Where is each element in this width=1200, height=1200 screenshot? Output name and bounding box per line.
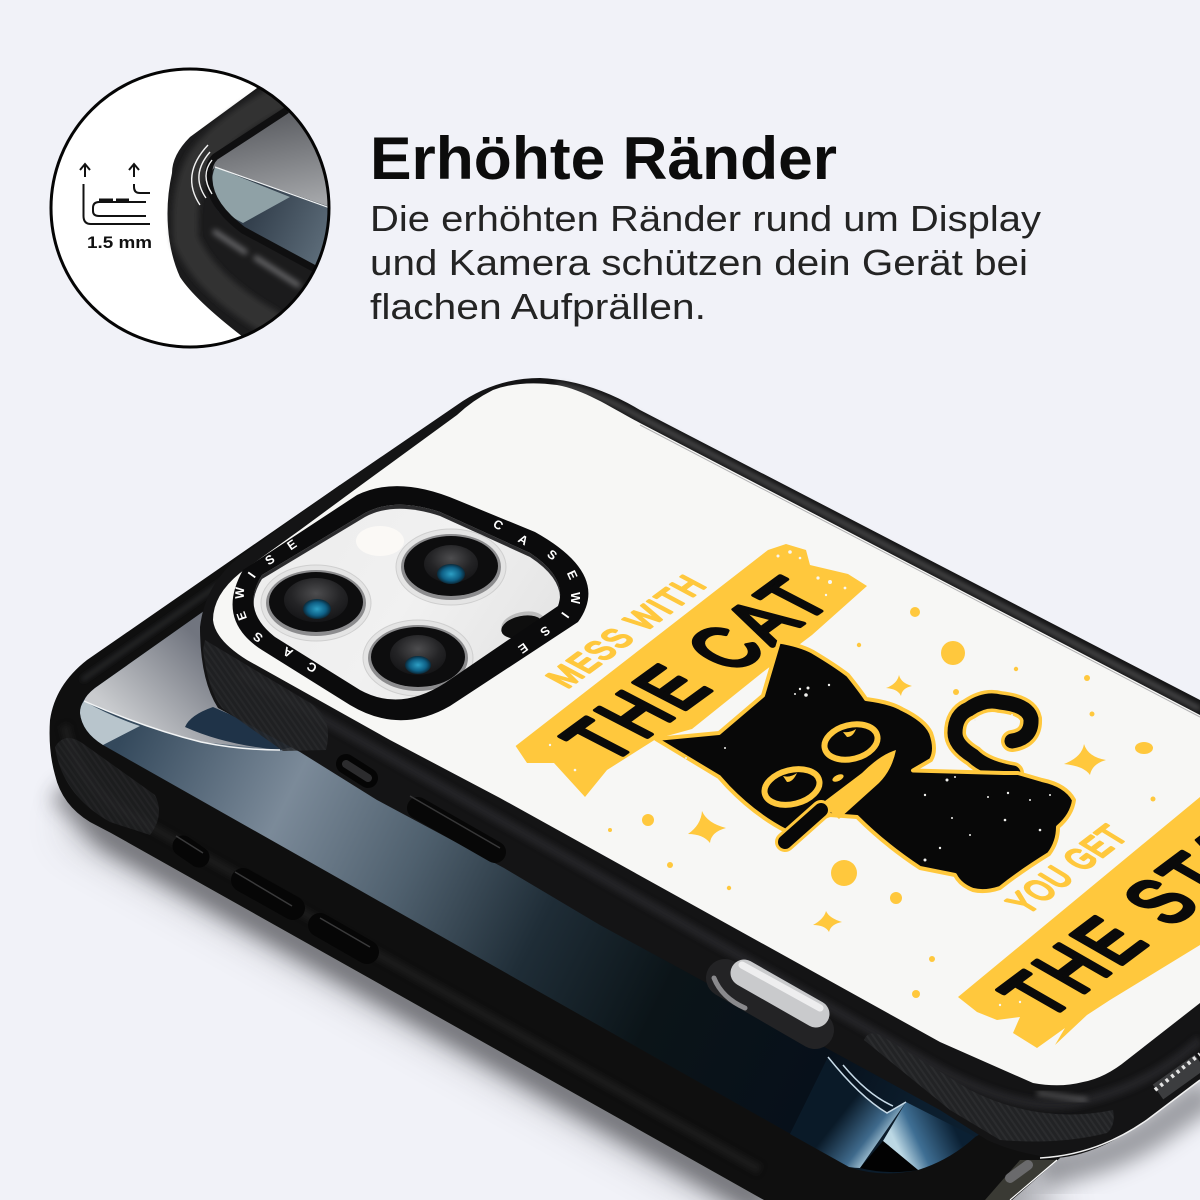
charging port metallic lip (714, 978, 745, 1008)
upper edge hairline (640, 425, 1200, 717)
wallpaper navy blob (185, 707, 300, 750)
left carbon patch (203, 640, 328, 751)
heading: Erhöhte Ränder (370, 125, 837, 192)
sparkle stars (688, 675, 1106, 932)
front corner white edge line (1040, 1080, 1200, 1158)
rear side port (1010, 1165, 1028, 1178)
charging port surround (725, 978, 815, 1030)
artwork: cat design (516, 544, 1200, 1048)
ring lettering CASEWISE: I (245, 570, 259, 580)
description text: und Kamera schützen dein Gerät bei (370, 242, 1028, 283)
rear corner translucent edge (985, 1160, 1057, 1200)
inset circle: raised edge close-up (50, 68, 340, 348)
inset screen black rim (209, 110, 317, 270)
ring lettering CASEWISE: W (233, 587, 247, 599)
rear corner white line (1010, 1160, 1057, 1200)
inset circle outline (51, 69, 329, 347)
wallpaper grey upper (84, 515, 400, 750)
front bumper highlight (240, 672, 1200, 1105)
corner speaker housing (1158, 1062, 1200, 1092)
wallpaper glow left strip (790, 1057, 906, 1168)
text MESS WITH: MESS WITH (537, 570, 714, 693)
ring lettering CASEWISE: A (281, 644, 295, 660)
rear screen (80, 480, 1040, 1173)
knife handle outline (785, 810, 821, 842)
ring lettering CASEWISE: A (516, 532, 530, 548)
mic hole dark (499, 612, 545, 642)
ring lettering CASEWISE: E (234, 610, 250, 622)
charging port highlight (742, 965, 820, 1008)
wallpaper pale wedge (80, 701, 140, 745)
corner bumper glints (1037, 1093, 1087, 1100)
lens top (396, 529, 506, 605)
ring lettering CASEWISE: C (305, 659, 319, 675)
front phone (200, 378, 1200, 1158)
inset impact arcs (192, 145, 212, 205)
ring lettering CASEWISE: E (564, 568, 580, 582)
ring lettering CASEWISE: C (491, 517, 505, 533)
wallpaper glow right strip (883, 1102, 975, 1170)
top edge inner grey fade (557, 385, 1200, 709)
band paint specks (549, 550, 1021, 1006)
ring lettering CASEWISE: S (251, 629, 265, 645)
ring lettering CASEWISE (233, 517, 582, 675)
corner speaker grill (1155, 1054, 1200, 1090)
drop shadow of front phone (1040, 1090, 1200, 1170)
paint dots (608, 607, 1156, 998)
inset screen upper wallpaper (210, 110, 335, 207)
ring lettering CASEWISE: S (537, 623, 553, 639)
ring lettering CASEWISE: S (544, 547, 560, 563)
mic slot (346, 764, 368, 778)
inset screen lower wallpaper (211, 167, 330, 270)
knife blade (821, 750, 896, 819)
camera inner wall (254, 505, 560, 699)
cat nose (832, 774, 844, 782)
inset bumper highlight (185, 95, 285, 322)
inset raised-edge icon (80, 164, 150, 224)
inset phone corner body (168, 88, 340, 340)
cat tail outline (955, 701, 1031, 773)
camera module (233, 486, 588, 720)
charging port inner (744, 973, 816, 1014)
ring lettering CASEWISE: S (263, 552, 277, 568)
inset button highlight (215, 232, 298, 285)
cat tail (955, 701, 1031, 773)
wallpaper arcs (828, 1057, 906, 1113)
yellow brush band upper (516, 544, 867, 797)
description text: flachen Aufprällen. (370, 286, 706, 327)
lens left (261, 565, 371, 641)
inset screen white line (215, 167, 330, 208)
wallpaper dark triangle (860, 1141, 918, 1172)
description text (370, 198, 1041, 327)
rear phone pill button (183, 846, 199, 857)
rear carbon patch (55, 738, 159, 835)
camera plateau (254, 509, 560, 703)
ring lettering CASEWISE: W (568, 592, 582, 604)
ring lettering CASEWISE: E (285, 537, 299, 553)
cat body and head (656, 642, 1074, 891)
rear phone volume up button (243, 880, 293, 908)
description text: Die erhöhten Ränder rund um Display (370, 198, 1041, 239)
cat fur specks (685, 684, 1051, 862)
cat left eye (762, 766, 822, 808)
inset label 1.5 mm: 1.5 mm (87, 234, 152, 252)
camera flash (356, 526, 404, 556)
cat right eye (821, 719, 881, 765)
mic slot highlight (346, 764, 368, 778)
rear top bumper highlight (82, 528, 300, 680)
rear bumper highlight (65, 725, 760, 1170)
wallpaper white curve (84, 701, 280, 750)
knife handle (785, 810, 821, 842)
rear phone volume down button (320, 925, 367, 952)
right carbon patch (864, 1033, 1114, 1141)
camera ring (233, 486, 588, 720)
text THE CAT: THE CAT (544, 568, 849, 773)
cat eye highlights (783, 729, 856, 782)
tight drop shadow of rear phone (60, 790, 764, 1200)
front phone case body (200, 378, 1200, 1158)
mic hole (499, 608, 547, 640)
rear phone (50, 480, 1060, 1200)
ring lettering CASEWISE: E (516, 640, 530, 656)
yellow brush band lower (958, 797, 1200, 1048)
rear button highlights (176, 836, 370, 947)
wide drop shadow of rear phone (66, 726, 1056, 1200)
front white back surface (213, 383, 1200, 1085)
ring lettering CASEWISE: I (558, 610, 572, 620)
side long button (418, 808, 495, 852)
side long button edge (410, 796, 500, 848)
inset light wallpaper wedge (212, 167, 290, 223)
rear phone case body (50, 480, 1060, 1200)
text YOU GET: YOU GET (997, 819, 1136, 919)
lens bottom (363, 620, 473, 696)
